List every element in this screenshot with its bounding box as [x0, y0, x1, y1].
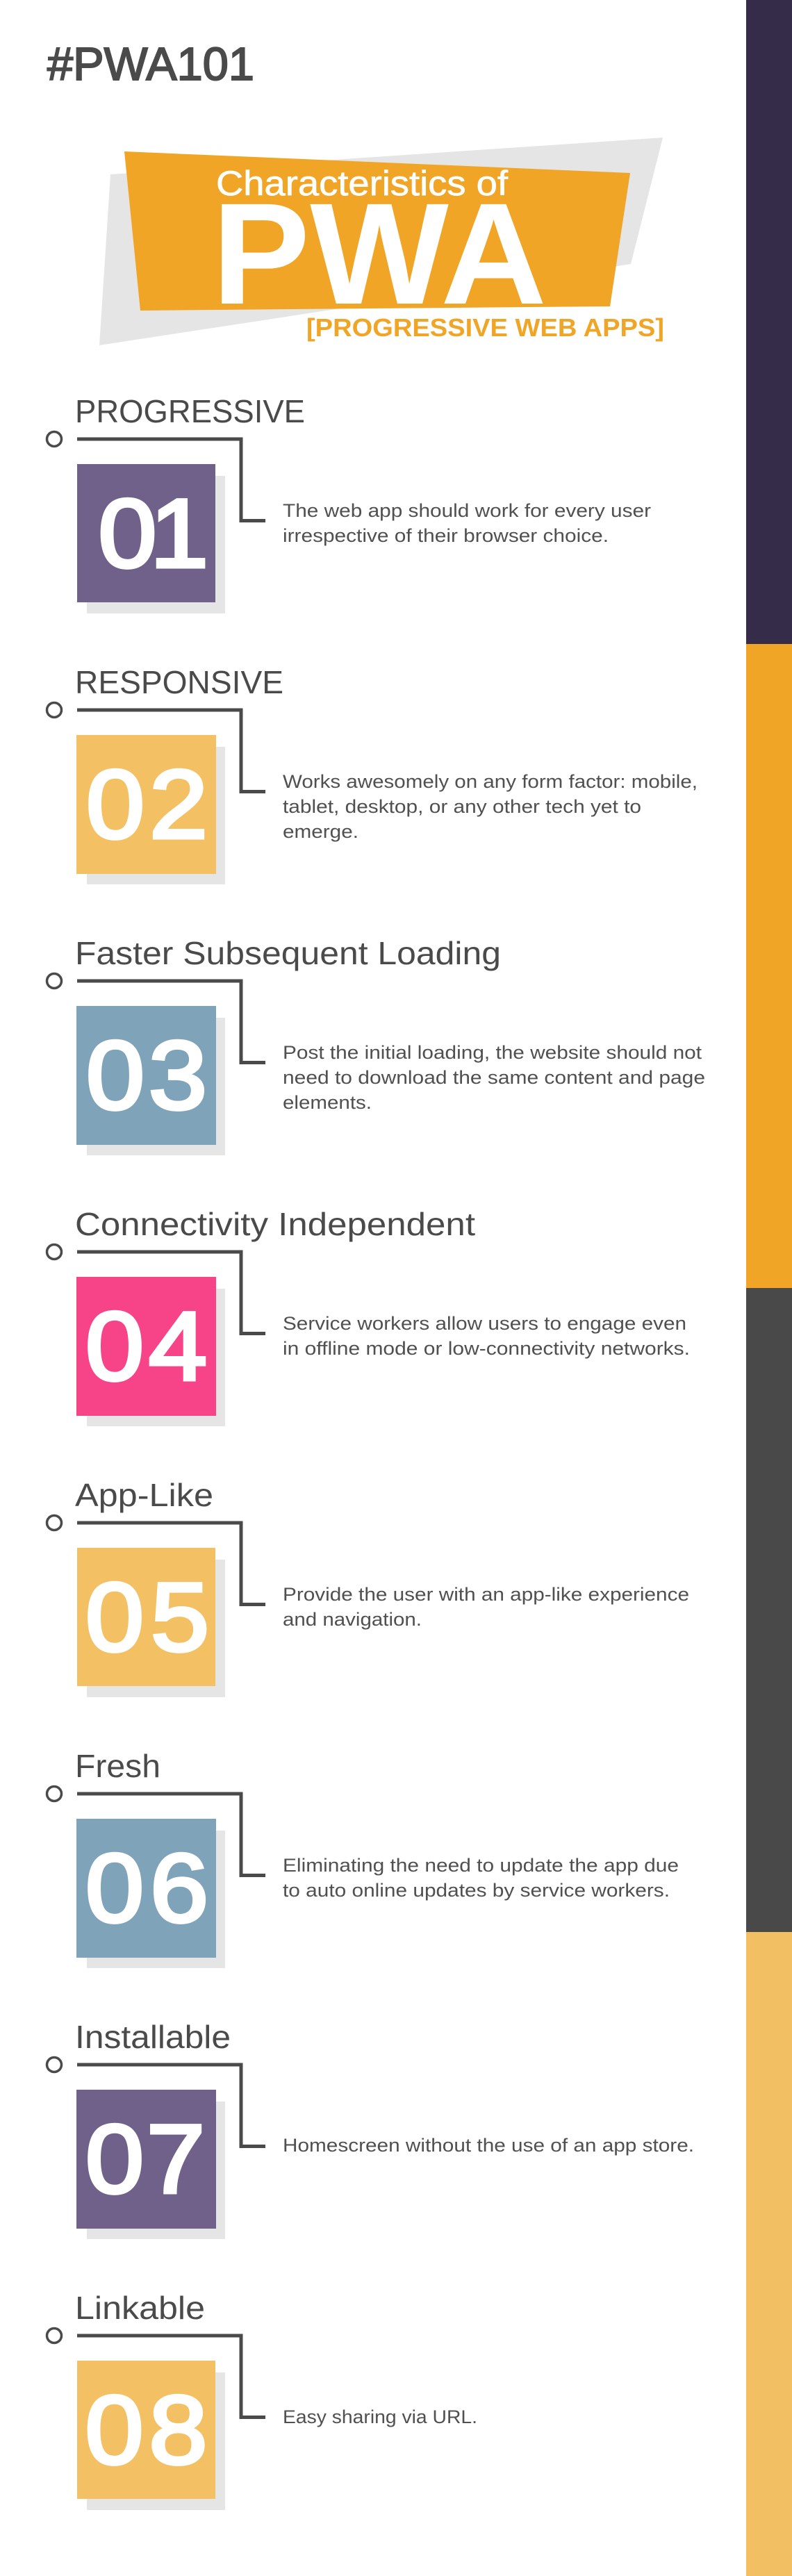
- item 02 shadow: [87, 747, 225, 884]
- item 03 number: 03: [86, 1021, 207, 1130]
- item 02: responsive: [47, 664, 698, 884]
- item 05 heading: App-Like: [75, 1477, 213, 1513]
- banner line: characteristics of: Characteristics of: [216, 164, 508, 203]
- item 05: app-like: [47, 1477, 689, 1697]
- item 07 heading: Installable: [75, 2019, 231, 2055]
- item 07 bullet: [47, 2058, 61, 2072]
- item 07 connector: [77, 2065, 265, 2147]
- item 01 connector: [77, 439, 265, 521]
- item 04 shadow: [87, 1289, 225, 1426]
- item 02 connector: [77, 710, 265, 792]
- item 01 number box: [77, 464, 215, 602]
- item 04 heading: Connectivity Independent: [75, 1206, 475, 1242]
- item 05 shadow: [87, 1560, 225, 1697]
- banner orange polygon: [124, 151, 630, 311]
- item 05 connector: [77, 1523, 265, 1605]
- hashtag heading: #PWA101: [47, 38, 254, 90]
- title banner: [99, 138, 664, 345]
- item 04 description: Service workers allow users to engage even: [283, 1313, 686, 1334]
- item 02 bullet: [47, 703, 61, 717]
- item 04 number: 04: [85, 1291, 207, 1401]
- banner word: PWA: PWA: [212, 174, 547, 335]
- item 02 description: Works awesomely on any form factor: mobile,: [283, 771, 698, 792]
- item 07 description: Homescreen without the use of an app store.: [283, 2135, 694, 2156]
- item 08 description: Easy sharing via URL.: [283, 2406, 477, 2427]
- item 06 heading: Fresh: [75, 1748, 160, 1784]
- item 03: faster subsequent loading: [47, 935, 705, 1155]
- item 08 heading: Linkable: [75, 2290, 205, 2326]
- item 03 bullet: [47, 974, 61, 988]
- item 05 description line 2: and navigation.: [283, 1609, 422, 1630]
- item 08 number box: [77, 2361, 215, 2499]
- item 01 description line 2: irrespective of their browser choice.: [283, 525, 609, 546]
- item 03 description: Post the initial loading, the website should not: [283, 1042, 702, 1063]
- banner shadow polygon: [99, 138, 663, 345]
- item 06 number box: [76, 1819, 216, 1958]
- item 06 description line 2: to auto online updates by service workers.: [283, 1880, 670, 1901]
- item 08 bullet: [47, 2329, 61, 2343]
- item 05 number box: [77, 1548, 215, 1686]
- item 03 shadow: [87, 1018, 225, 1155]
- item 05 number: 05: [85, 1562, 209, 1671]
- item 01 description: The web app should work for every user: [283, 500, 651, 521]
- item 03 number box: [76, 1006, 216, 1145]
- item 06 description: Eliminating the need to update the app due: [283, 1855, 679, 1876]
- item 03 description line 2: need to download the same content and page: [283, 1067, 705, 1088]
- item 06: fresh: [47, 1748, 679, 1968]
- item 06 shadow: [87, 1831, 225, 1968]
- item 02 heading: RESPONSIVE: [75, 664, 283, 700]
- item 01 heading: PROGRESSIVE: [75, 393, 305, 429]
- item 02 description line 2: tablet, desktop, or any other tech yet to: [283, 796, 641, 817]
- item 08 shadow: [87, 2372, 225, 2510]
- item 04: connectivity independent: [47, 1206, 690, 1426]
- item 02 number: 02: [86, 750, 208, 859]
- item 01: progressive: [47, 393, 651, 613]
- sidebar: colour stripes: [746, 0, 792, 2576]
- item 03 heading: Faster Subsequent Loading: [75, 935, 501, 971]
- item 01 bullet: [47, 432, 61, 446]
- item 08: linkable: [47, 2290, 477, 2510]
- item 08 number: 08: [85, 2375, 208, 2484]
- item 03 description line 3: elements.: [283, 1092, 372, 1113]
- item 02 description line 3: emerge.: [283, 821, 358, 842]
- item 04 bullet: [47, 1245, 61, 1259]
- item 06 number: 06: [85, 1833, 208, 1942]
- item 07 number: 07: [85, 2104, 205, 2213]
- item 01 number: 01: [98, 479, 208, 588]
- item 06 bullet: [47, 1787, 61, 1801]
- item 03 connector: [77, 981, 265, 1063]
- item 07: installable: [47, 2019, 694, 2239]
- item 01 shadow: [87, 476, 225, 613]
- item 02 number box: [76, 735, 216, 874]
- item 05 description: Provide the user with an app-like experience: [283, 1584, 689, 1605]
- banner subtitle: [PROGRESSIVE WEB APPS]: [306, 313, 664, 342]
- item 07 shadow: [87, 2102, 225, 2239]
- item 05 bullet: [47, 1516, 61, 1530]
- item 04 description line 2: in offline mode or low-connectivity networks.: [283, 1338, 690, 1359]
- item 04 number box: [76, 1277, 216, 1416]
- item 07 number box: [76, 2090, 216, 2229]
- item 04 connector: [77, 1252, 265, 1334]
- item 06 connector: [77, 1794, 265, 1876]
- item 08 connector: [77, 2336, 265, 2418]
